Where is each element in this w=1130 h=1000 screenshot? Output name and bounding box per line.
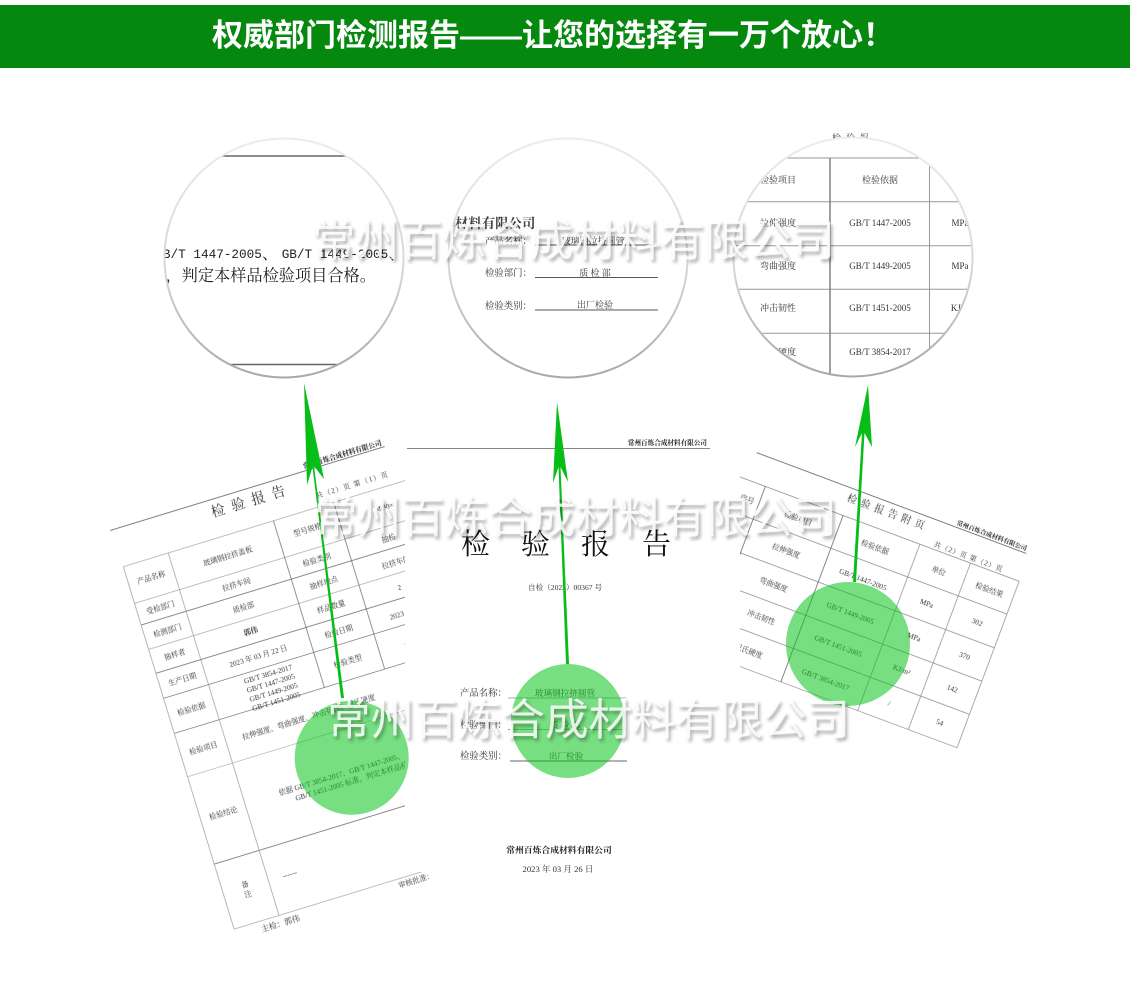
report page: right rotated report appendix: MPa [919,597,935,610]
magnifier: appendix table: 检验依据 [862,174,898,185]
report page: left rotated inspection report: 检验依据 [176,700,207,718]
report page: left rotated inspection report: GB/T 1449-2005 [248,681,299,704]
report page: left rotated inspection report: GB/T 1451-2005 标准，判定本样品检验项目合格。 [294,747,451,804]
report page: left rotated inspection report: 质检部 [232,600,256,615]
report page: left rotated inspection report: 共（2）页 第（1）页 [315,469,390,500]
report page: centre cover page: 玻璃钢拉挤圆管 [535,687,595,698]
report page: left rotated inspection report: 2023 年 03 月 [388,601,431,622]
report page: centre cover page: 质 检 部 [550,719,580,730]
report page: right rotated report appendix: 序号 [739,493,756,506]
report page: centre cover page: 自检（2023）00367 号 [528,582,602,592]
report page: right rotated report appendix: 检验结果 [974,581,1005,599]
report page: left rotated inspection report: 注 [243,888,253,899]
report page: left rotated inspection report: 玻璃钢拉挤盖板 [202,544,254,568]
report page: left rotated inspection report: 2023 年 03 月 22 日 [228,643,288,669]
report page: left rotated inspection report: 生产日期 [167,671,198,688]
report page: right rotated report appendix: 检验依据 [860,538,891,557]
magnifier: appendix table: MPa [951,218,969,228]
magnifier: appendix table: 弯曲强度 [760,260,796,271]
arrow: right report to magnifier [853,385,872,582]
magnifier: appendix table: 冲击韧性 [760,302,796,313]
arrow: left report to magnifier [304,383,344,698]
report page: left rotated inspection report: 检测部门 [152,622,183,639]
magnifier: report conclusion: 、 [388,246,405,263]
magnifier: cover details: 产品名称： [485,235,532,247]
report page: right rotated report appendix: GB/T 3854-2017 [801,667,851,693]
report page: right rotated report appendix: 142 [946,683,959,695]
report page: right rotated report appendix: 单位 [930,564,948,578]
report page: centre cover page: 2023 年 03 月 26 日 [523,863,593,874]
report page: centre cover page: 常州百炼合成材料有限公司 [506,844,612,855]
report page: right rotated report appendix: 370 [958,650,972,662]
report page: right rotated report appendix: 54 [935,717,945,728]
report page: left rotated inspection report: 1 [403,641,409,651]
report page: right rotated report appendix: 检验报告附页 [845,491,931,534]
magnifier: cover details: 检验类别： [485,300,532,312]
magnifier: cover details: 质 检 部 [579,267,611,278]
magnifier: appendix table: KJ/m² [951,303,973,313]
highlight circle: centre report [511,664,625,778]
magnifier: report conclusion: 、 [262,246,278,263]
report page: left rotated inspection report [110,439,430,932]
report page: right rotated report appendix: KJ/m² [892,662,913,677]
report page: left rotated inspection report: 抽样者 [163,647,187,662]
magnifier: appendix table: 检验报 [832,132,874,143]
magnifier: report conclusion [155,138,410,378]
report page: left rotated inspection report: GB/T 1447-2005 [246,671,296,695]
report page: right rotated report appendix: 常州百炼合成材料有限公司 [956,519,1028,553]
magnifier: appendix table: MPa [951,261,969,271]
title banner [0,5,1130,68]
report page: left rotated inspection report: ------ [281,867,299,880]
highlight circle: left report [295,701,409,815]
magnifier: appendix table: GB/T 1447-2005 [849,218,911,228]
arrow: centre report to magnifier [553,402,569,664]
magnifier: appendix table: GB/T 1451-2005 [849,303,911,313]
report page: right rotated report appendix: 检验项目 [783,509,813,528]
report page: right rotated report appendix: GB/T 1451-2005 [813,633,863,659]
report cover title: 验 [521,528,550,561]
watermark: top: 常州百炼合成材料有限公司 [312,218,835,266]
report page: left rotated inspection report: 抽检 [380,532,398,545]
report page: right rotated report appendix [740,452,1028,748]
magnifier: report conclusion: GB/T 1447-2005 [155,247,262,262]
report page: left rotated inspection report: 受检部门 [145,599,176,616]
report page: right rotated report appendix: 冲击韧性 [746,608,777,627]
watermark: bottom: 常州百炼合成材料有限公司 [327,697,850,745]
report page: left rotated inspection report: 拉伸强度、弯曲强度、冲击韧性、巴氏硬度 [241,692,377,742]
report cover title: 报 [581,528,610,561]
report page: centre cover page: 出厂检验 [549,750,584,761]
report page: centre cover page: 检验类别： [460,750,507,762]
report page: left rotated inspection report: 备 [240,879,251,890]
magnifier: cover details: 材料有限公司 [455,215,535,231]
highlight circle: right report [786,582,910,706]
report page: left rotated inspection report: 检验日期 [323,623,355,640]
report page: right rotated report appendix: / [887,699,893,708]
magnifier: cover details: 检验部门： [485,267,532,279]
report page: left rotated inspection report: 常州百炼合成材料有限公司 [302,438,383,471]
report cover title [461,528,671,561]
report page: left rotated inspection report: 主检：郭伟 [260,913,301,934]
report page: left rotated inspection report: 检验类别 [301,551,332,568]
report page: right rotated report appendix: 弯曲强度 [758,575,789,594]
magnifier: appendix table: 检验项目 [760,174,796,185]
report page: left rotated inspection report: 检验结论 [208,804,239,822]
report page: right rotated report appendix: MPa [906,630,923,644]
report page: right rotated report appendix: 拉伸强度 [771,541,802,560]
report page: centre cover page: 常州百炼合成材料有限公司 [628,438,707,447]
report page: left rotated inspection report: 审核批准： [397,871,435,890]
report page: right rotated report appendix: GB/T 1449-2005 [825,600,876,626]
report page: left rotated inspection report: Φ30× [376,500,395,514]
report page: centre cover page: 检验部门： [460,719,507,731]
magnifier: cover details [448,138,688,378]
report page: centre cover page [407,438,710,874]
report page: left rotated inspection report: 样品数量 [316,598,346,615]
report page: left rotated inspection report: 型号规格 [292,521,323,538]
report page: left rotated inspection report: 拉挤车间 [221,576,252,593]
report page: left rotated inspection report: 检验项目 [188,740,219,757]
report page: left rotated inspection report: GB/T 3854-2017 [243,662,294,686]
magnifier: report conclusion: ，判定本样品检验项目合格。 [166,267,376,285]
report page: left rotated inspection report: 产品名称 [136,569,167,586]
report page: left rotated inspection report: 拉挤车间 [381,554,411,571]
magnifier: cover details: 出厂检验 [577,299,613,310]
report page: right rotated report appendix: 共（2）页 第（2）页 [933,539,1005,574]
magnifier: appendix table [730,132,980,380]
magnifier: appendix table: GB/T 1449-2005 [849,261,911,271]
report page: right rotated report appendix: 巴氏硬度 [733,642,765,661]
report page: right rotated report appendix: GB/T 1447-2005 [838,567,888,593]
report page: left rotated inspection report: 依据 GB/T 3854-2017、GB/T 1447-2005、 [278,751,405,797]
magnifier: appendix table: GB/T 3854-2017 [849,347,911,357]
report page: centre cover page: 产品名称： [460,687,507,699]
report page: left rotated inspection report: 检验类型 [332,653,363,670]
report page: left rotated inspection report: 检验报告 [209,480,294,521]
magnifier: appendix table: 巴氏硬度 [760,346,796,357]
report page: left rotated inspection report: GB/T 1451-2005 [251,690,302,713]
title banner: 权威部门检测报告——让您的选择有一万个放心！ [212,18,894,53]
report cover title: 告 [642,528,671,561]
magnifier: cover details: 玻璃钢拉挤圆管 [561,235,625,246]
report page: right rotated report appendix: 302 [971,616,984,628]
report page: left rotated inspection report: 抽样地点 [308,574,340,591]
report page: left rotated inspection report: 2 [396,582,403,592]
report cover title: 检 [461,528,490,561]
magnifier: report conclusion: GB/T 1449-2005 [282,247,388,262]
magnifier: appendix table: 拉伸强度 [760,217,796,228]
watermark: middle: 常州百炼合成材料有限公司 [314,495,837,543]
report page: left rotated inspection report: 郭伟 [242,625,260,638]
